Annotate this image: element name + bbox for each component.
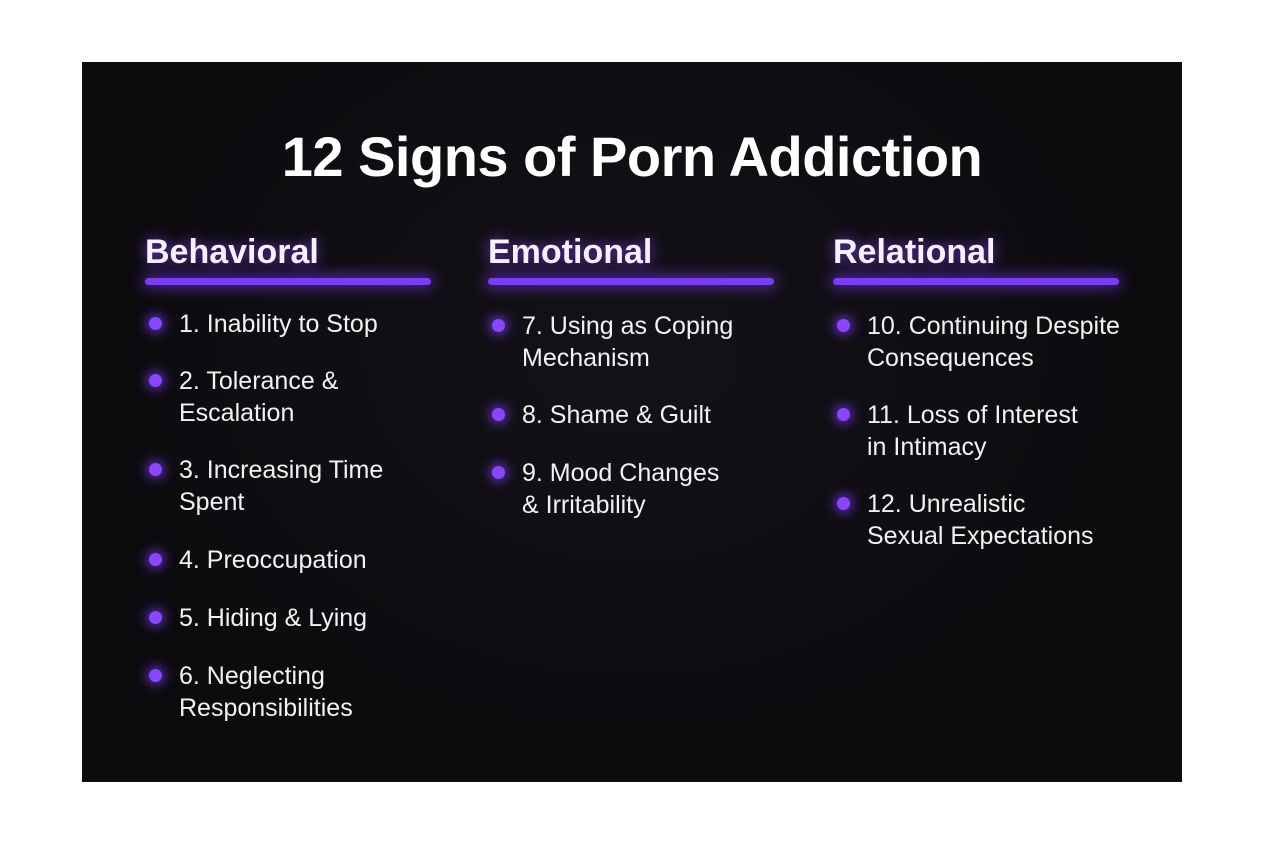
item 10: 10. Continuing Despite xyxy=(867,312,1120,340)
item 2 xyxy=(139,364,338,427)
item 8 xyxy=(482,398,711,432)
bar: emotional underline xyxy=(488,278,774,285)
item 9: 9. Mood Changes xyxy=(522,459,719,487)
title: 12 Signs of Porn Addiction xyxy=(282,125,982,188)
item 7: Mechanism xyxy=(522,344,650,372)
item 5: 5. Hiding & Lying xyxy=(179,604,367,632)
item 4: 4. Preoccupation xyxy=(179,546,367,574)
heading: emotional: Emotional xyxy=(488,233,652,271)
item 1 xyxy=(139,307,378,340)
item 6: Responsibilities xyxy=(179,694,353,722)
item 7: 7. Using as Coping xyxy=(522,312,733,340)
item 1: 1. Inability to Stop xyxy=(179,310,378,338)
item 12 xyxy=(827,487,1094,550)
item 5 xyxy=(139,601,367,634)
heading: relational: Relational xyxy=(833,233,995,271)
item 3: Spent xyxy=(179,488,244,516)
heading: behavioral: Behavioral xyxy=(145,233,319,271)
item 11: 11. Loss of Interest xyxy=(867,401,1078,429)
item 7 xyxy=(482,309,733,372)
item 11 xyxy=(827,398,1078,461)
item 10 xyxy=(827,309,1120,372)
item 9 xyxy=(482,456,719,519)
item 12: 12. Unrealistic xyxy=(867,490,1025,518)
item 6: 6. Neglecting xyxy=(179,662,325,690)
item 8: 8. Shame & Guilt xyxy=(522,401,711,429)
item 4 xyxy=(139,543,367,576)
item 11: in Intimacy xyxy=(867,433,986,461)
item 12: Sexual Expectations xyxy=(867,522,1094,550)
item 9: & Irritability xyxy=(522,491,646,519)
item 2: Escalation xyxy=(179,399,294,427)
panel: background xyxy=(82,62,1182,782)
panel: behavioral xyxy=(134,230,442,722)
panel: relational xyxy=(822,230,1130,550)
item 10: Consequences xyxy=(867,344,1034,372)
panel: emotional xyxy=(478,230,784,519)
bar: relational underline xyxy=(833,278,1119,285)
item 3 xyxy=(139,453,383,516)
bar: behavioral underline xyxy=(145,278,431,285)
item 6 xyxy=(139,659,353,722)
item 2: 2. Tolerance & xyxy=(179,367,338,395)
item 3: 3. Increasing Time xyxy=(179,456,383,484)
